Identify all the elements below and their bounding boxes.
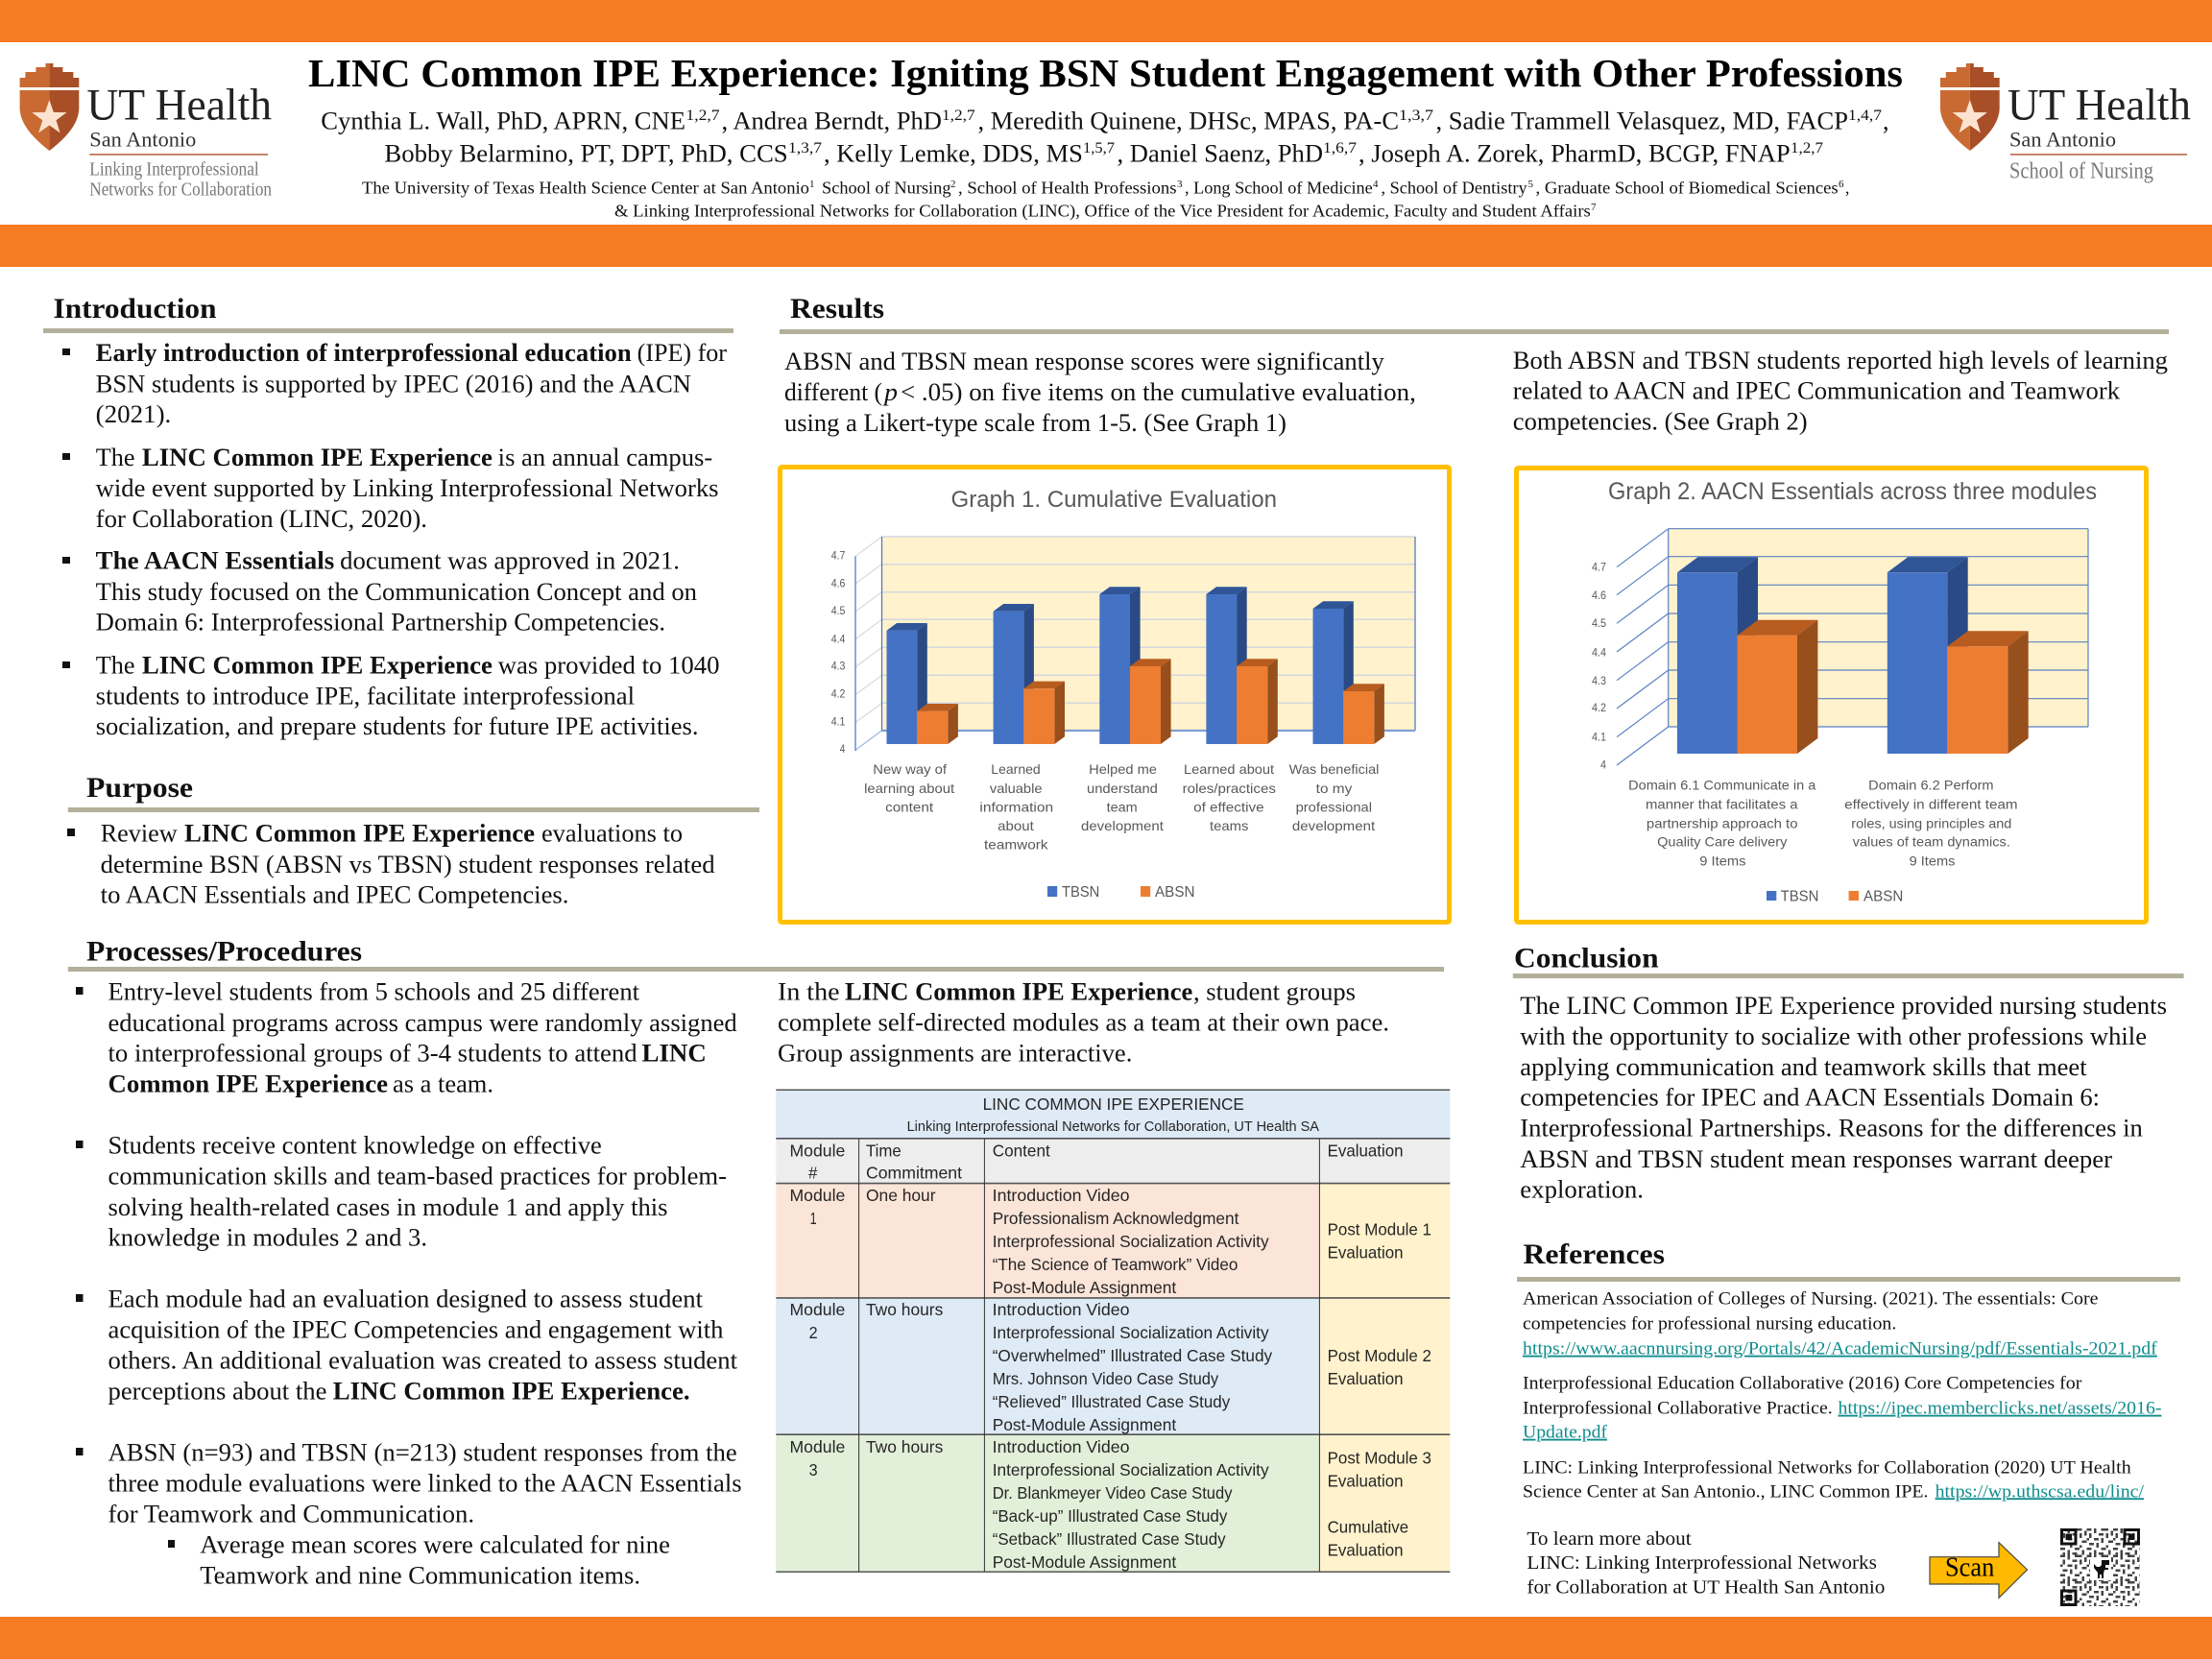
y axis labels: 4.6 (1592, 589, 1606, 602)
y axis labels: 4 (840, 744, 846, 756)
panel: processes and procedures (68, 936, 1444, 1589)
bars: ABSN (1738, 620, 2029, 754)
authors: 1,3,7 (1399, 108, 1433, 124)
authors: Cynthia L. Wall, PhD, APRN, CNE (321, 107, 685, 134)
reference: LINC: LINC: Linking Interprofessional Networks for Collaboration (2020) UT Health (1523, 1458, 2131, 1478)
column headers: Time (866, 1141, 902, 1160)
row: module 2 (789, 1300, 1431, 1434)
category labels: values of team dynamics. (1853, 833, 2010, 849)
bullet list: procedures: perceptions about the (108, 1377, 326, 1406)
column headers: Module (789, 1141, 845, 1160)
authors: , Kelly Lemke, DDS, MS (824, 139, 1083, 167)
plot back wall (1617, 529, 2088, 765)
panel: references (1517, 1238, 2180, 1606)
text: learn more: for Collaboration at UT Health San Antonio (1527, 1577, 1885, 1598)
text: graph 1 summary: using a Likert-type scale from 1-5. (See Graph 1) (784, 408, 1286, 437)
column headers (789, 1141, 1404, 1183)
row: module 1: Post-Module Assignment (993, 1278, 1176, 1297)
reference: IPEC: https://ipec.memberclicks.net/assets/2016- (1838, 1400, 2162, 1419)
chart title: Graph 1. Cumulative Evaluation (950, 487, 1277, 513)
bullet: purpose statement (67, 819, 715, 909)
bullet list: procedures: educational programs across campus were randomly assigned (108, 1008, 737, 1037)
bullet list: introduction: Domain 6: Interprofessional Partnership Competencies. (96, 607, 665, 636)
category labels: understand (1087, 781, 1158, 796)
text: graph 2 summary: related to AACN and IPEC Communication and Teamwork (1513, 376, 2121, 405)
affiliations: , (1845, 179, 1849, 198)
bullet list: introduction: (IPE) for (637, 338, 727, 367)
panel: introduction (43, 293, 733, 740)
bullet list: procedures: others. An additional evaluation was created to assess student (108, 1346, 738, 1375)
bullet: purpose statement: to AACN Essentials and IPEC Competencies. (101, 880, 568, 909)
bullet list: procedures: LINC Common IPE Experience. (333, 1377, 690, 1406)
y axis labels: 4.3 (1592, 674, 1606, 687)
row: module 2: Post Module 2 (1328, 1346, 1431, 1365)
row: module 2: Mrs. Johnson Video Case Study (993, 1369, 1218, 1388)
authors: 1,5,7 (1083, 140, 1115, 156)
authors: , Daniel Saenz, PhD (1118, 139, 1323, 167)
bullet list: procedures: Each module had an evaluation designed to assess student (108, 1285, 704, 1313)
category labels: professional (1296, 799, 1372, 814)
logo: UT Health San Antonio School of Nursing: School of Nursing (2009, 159, 2153, 184)
row: module 3: Post-Module Assignment (993, 1552, 1176, 1572)
bullet list: procedures (76, 977, 742, 1589)
arrow: scan (1930, 1543, 2028, 1598)
row: module 3: Introduction Video (993, 1437, 1129, 1456)
legend: ABSN (1863, 888, 1903, 904)
row: module 1: Interprofessional Socialization Activity (993, 1232, 1269, 1251)
text: graph 2 summary: Both ABSN and TBSN students reported high levels of learning (1513, 346, 2168, 374)
lower header orange band (0, 225, 2212, 267)
row: module 3: Evaluation (1328, 1541, 1404, 1560)
bullet: purpose statement: Review (101, 819, 179, 848)
bullet list: procedures: Entry-level students from 5 schools and 25 different (108, 977, 640, 1006)
row: module 3: Module (789, 1437, 845, 1456)
row: module 3: Two hours (866, 1437, 944, 1456)
text: module description: In the (778, 977, 839, 1006)
arrow: scan: Scan (1945, 1553, 1994, 1583)
panel: results (780, 293, 2169, 437)
text: graph 1 summary (784, 347, 1416, 437)
text: learn more (1527, 1529, 1885, 1598)
y axis labels: 4.4 (831, 634, 846, 645)
legend: TBSN (1781, 888, 1818, 904)
authors: 1,3,7 (788, 140, 822, 156)
bullet list: introduction: LINC Common IPE Experience (142, 443, 493, 471)
bullet list: procedures: LINC (641, 1039, 707, 1068)
reference: AACN: competencies for professional nursing education. (1523, 1314, 1896, 1334)
y axis labels (831, 551, 846, 756)
panel: purpose (67, 772, 759, 909)
y axis labels: 4.4 (1592, 645, 1606, 659)
authors: 1,6,7 (1323, 140, 1357, 156)
category labels: Quality Care delivery (1657, 833, 1787, 849)
authors: 1,2,7 (1791, 140, 1823, 156)
category labels (864, 761, 1379, 852)
plot back wall (855, 537, 1415, 751)
affiliations: & Linking Interprofessional Networks for Collaboration (LINC), Office of the Vice President for Academic, Faculty and Student Affairs (614, 202, 1591, 221)
row: module 2: Evaluation (1328, 1369, 1404, 1388)
reference: AACN: American Association of Colleges of Nursing. (2021). The essentials: Core (1523, 1289, 2099, 1309)
logo: UT Health San Antonio LINC: Linking Interprofessional (89, 159, 259, 180)
logo: UT Health San Antonio School of Nursing (1940, 63, 2191, 184)
affiliations: 7 (1591, 202, 1597, 213)
category labels: about (998, 818, 1034, 833)
row: module 2: “Overwhelmed” Illustrated Case Study (993, 1346, 1272, 1365)
row: module 3: “Setback” Illustrated Case Study (993, 1529, 1226, 1549)
text: graph 2 summary: competencies. (See Graph 2) (1513, 407, 1808, 436)
affiliations: 6 (1839, 179, 1844, 190)
column headers: Content (993, 1141, 1050, 1160)
affiliations: 4 (1373, 179, 1379, 190)
category labels: learning about (864, 781, 954, 796)
logo: UT Health San Antonio LINC: UT Health (86, 80, 272, 130)
legend (1767, 888, 1903, 904)
bullet list: procedures: to interprofessional groups of 3-4 students to attend (108, 1039, 637, 1068)
bullet list: procedures: communication skills and team-based practices for problem- (108, 1162, 727, 1190)
icon: shield (20, 63, 79, 151)
category labels: information (979, 799, 1053, 814)
category labels: 9 Items (1699, 853, 1745, 868)
bullet list: introduction: is an annual campus- (498, 443, 712, 471)
text: learn more: To learn more about (1527, 1529, 1692, 1550)
text: graph 2 summary (1513, 346, 2168, 436)
bullet list: introduction: (2021). (96, 399, 171, 428)
row: module 3: Interprofessional Socialization Activity (993, 1460, 1269, 1479)
table title (907, 1094, 1319, 1135)
category labels: New way of (873, 761, 947, 777)
row: module 3: “Back-up” Illustrated Case Study (993, 1506, 1228, 1526)
bullet list: introduction: was provided to 1040 (498, 651, 720, 680)
text: learn more: LINC: Linking Interprofessional Networks (1527, 1553, 1877, 1574)
authors: Bobby Belarmino, PT, DPT, PhD, CCS (384, 139, 788, 167)
bullet list: introduction (62, 338, 727, 740)
bullet list: procedures: for Teamwork and Communication. (108, 1500, 474, 1528)
authors: 1,4,7 (1848, 108, 1882, 124)
category labels: development (1081, 818, 1164, 833)
icon: QR code (2060, 1528, 2140, 1606)
heading: references: References (1523, 1238, 1665, 1270)
bullet list: introduction: The (96, 651, 134, 680)
legend: TBSN (1062, 884, 1099, 901)
affiliations: 3 (1177, 179, 1183, 190)
icon: shield (1940, 63, 2000, 151)
table: LINC common IPE experience modules (776, 1090, 1450, 1572)
chart: graph 2 AACN essentials (1517, 469, 2147, 922)
affiliations: School of Nursing (822, 179, 951, 198)
text: module description (778, 977, 1389, 1068)
affiliations: 5 (1528, 179, 1534, 190)
legend: ABSN (1155, 884, 1194, 901)
bullet list: introduction: BSN students is supported by IPEC (2016) and the AACN (96, 369, 691, 397)
row: module 1: “The Science of Teamwork” Video (993, 1255, 1238, 1274)
bullet: purpose statement: LINC Common IPE Experience (184, 819, 535, 848)
table title: LINC COMMON IPE EXPERIENCE (983, 1094, 1244, 1114)
bullet list: procedures: solving health-related cases in module 1 and apply this (108, 1192, 668, 1221)
affiliations: , School of Health Professions (958, 179, 1177, 198)
text: conclusion body (1520, 991, 2167, 1204)
row: module 1: Post Module 1 (1328, 1220, 1431, 1239)
bullet list: procedures: as a team. (393, 1070, 493, 1098)
category labels: Domain 6.1 Communicate in a (1628, 777, 1816, 792)
category labels: roles, using principles and (1851, 815, 2011, 830)
logo: UT Health San Antonio LINC: San Antonio (89, 127, 196, 151)
category labels: Learned (991, 761, 1041, 777)
logo: UT Health San Antonio School of Nursing: San Antonio (2009, 127, 2116, 151)
category labels: valuable (990, 781, 1043, 796)
text: conclusion body: competencies for IPEC and AACN Essentials Domain 6: (1520, 1083, 2100, 1112)
bullet list: procedures: three module evaluations were linked to the AACN Essentials (108, 1468, 742, 1497)
row: module 1: Module (789, 1186, 845, 1205)
row: module 1: Introduction Video (993, 1186, 1129, 1205)
bullet list: introduction: The (96, 443, 134, 471)
authors: , Joseph A. Zorek, PharmD, BCGP, FNAP (1358, 139, 1791, 167)
category labels: to my (1316, 781, 1352, 796)
text: graph 1 summary: p (882, 377, 898, 406)
category labels (1628, 777, 2018, 868)
row: module 2: Interprofessional Socialization Activity (993, 1323, 1269, 1342)
bullet list: procedures: knowledge in modules 2 and 3. (108, 1223, 427, 1252)
heading: results: Results (790, 293, 884, 325)
y axis labels: 4.5 (831, 606, 845, 617)
logo: UT Health San Antonio LINC (20, 63, 272, 200)
category labels: partnership approach to (1647, 815, 1798, 830)
row: module 2: Two hours (866, 1300, 944, 1319)
category labels: of effective (1193, 799, 1264, 814)
row: module 1: Professionalism Acknowledgment (993, 1209, 1239, 1228)
bars: TBSN (1677, 557, 1968, 754)
bullet list: introduction: socialization, and prepare students for future IPE activities. (96, 711, 698, 740)
row: module 1 (789, 1186, 1431, 1297)
row: module 2: 2 (809, 1323, 818, 1342)
authors: , Sadie Trammell Velasquez, MD, FACP (1436, 107, 1848, 134)
text: module description: LINC Common IPE Experience (845, 977, 1193, 1006)
y axis labels: 4.5 (1592, 616, 1606, 630)
bullet list: procedures: Students receive content knowledge on effective (108, 1131, 602, 1160)
reference: IPEC: Update.pdf (1523, 1424, 1608, 1443)
row: module 2: “Relieved” Illustrated Case Study (993, 1392, 1230, 1411)
row: module 1: 1 (810, 1209, 817, 1228)
bullet list: introduction: This study focused on the Communication Concept and on (96, 577, 697, 606)
legend (1047, 884, 1194, 901)
chart title: Graph 2. AACN Essentials across three modules (1608, 478, 2097, 505)
bullet list: procedures: acquisition of the IPEC Competencies and engagement with (108, 1315, 724, 1344)
row: module 2: Module (789, 1300, 845, 1319)
affiliations (362, 179, 1849, 221)
bullet list: introduction: Early introduction of interprofessional education (96, 338, 632, 367)
row: module 1: One hour (866, 1186, 936, 1205)
y axis labels: 4.7 (831, 551, 845, 563)
bullet list: procedures: Common IPE Experience (108, 1070, 388, 1098)
category labels: Domain 6.2 Perform (1868, 777, 1994, 792)
reference: IPEC (1523, 1375, 2162, 1443)
reference: LINC: Science Center at San Antonio., LINC Common IPE. (1523, 1482, 1928, 1502)
bullet list: introduction: wide event supported by Linking Interprofessional Networks (96, 473, 718, 502)
category labels: 9 Items (1910, 853, 1955, 868)
authors: 1,2,7 (685, 108, 720, 124)
reference: IPEC: Interprofessional Education Collaborative (2016) Core Competencies for (1523, 1375, 2081, 1394)
row: module 3: Dr. Blankmeyer Video Case Study (993, 1483, 1233, 1503)
row: module 3: Post Module 3 (1328, 1449, 1431, 1468)
row: module 3: 3 (809, 1460, 818, 1479)
category labels: Was beneficial (1289, 761, 1379, 777)
text: module description: , student groups (1193, 977, 1356, 1006)
column headers: Commitment (866, 1164, 962, 1183)
authors: , Andrea Berndt, PhD (722, 107, 942, 134)
authors (321, 107, 1888, 167)
heading: introduction: Introduction (54, 293, 217, 325)
category labels: Learned about (1184, 761, 1274, 777)
category labels: effectively in different team (1844, 796, 2018, 811)
row: module 2: Post-Module Assignment (993, 1415, 1176, 1434)
row: module 3: Evaluation (1328, 1472, 1404, 1491)
affiliations: , Long School of Medicine (1185, 179, 1373, 198)
text: conclusion body: ABSN and TBSN student mean responses warrant deeper (1520, 1144, 2112, 1173)
affiliations: 2 (950, 179, 956, 190)
y axis labels: 4 (1600, 758, 1606, 772)
bullet list: procedures: Average mean scores were calculated for nine (200, 1530, 670, 1559)
category labels: team (1107, 799, 1138, 814)
affiliations: , School of Dentistry (1381, 179, 1527, 198)
text: graph 1 summary: < .05) on five items on the cumulative evaluation, (901, 377, 1416, 406)
category labels: manner that facilitates a (1646, 796, 1798, 811)
logo: UT Health San Antonio LINC: Networks for Collaboration (89, 179, 272, 200)
text: module description: complete self-directed modules as a team at their own pace. (778, 1007, 1389, 1036)
column headers: # (808, 1164, 818, 1183)
text: module description: Group assignments are interactive. (778, 1039, 1132, 1068)
top orange band (0, 0, 2212, 42)
bars: TBSN (887, 587, 1354, 744)
panel: conclusion (1513, 943, 2184, 1204)
reference: AACN: https://www.aacnnursing.org/Portals/42/AcademicNursing/pdf/Essentials-2021.pdf (1523, 1340, 2158, 1359)
y axis labels: 4.1 (831, 716, 845, 728)
authors: , Meredith Quinene, DHSc, MPAS, PA-C (977, 107, 1399, 134)
row: module 3 (789, 1437, 1431, 1572)
column headers: Evaluation (1328, 1141, 1404, 1160)
y axis labels: 4.1 (1592, 730, 1606, 743)
row: module 2: Introduction Video (993, 1300, 1129, 1319)
bullet list: procedures: Teamwork and nine Communication items. (200, 1560, 640, 1589)
text: graph 1 summary: ABSN and TBSN mean response scores were significantly (784, 347, 1385, 375)
y axis labels (1592, 561, 1606, 772)
title: LINC Common IPE Experience: Igniting BSN Student Engagement with Other Professions (308, 51, 1903, 95)
y axis labels: 4.2 (1592, 701, 1606, 714)
heading: conclusion: Conclusion (1514, 943, 1659, 974)
affiliations: , Graduate School of Biomedical Sciences (1536, 179, 1839, 198)
table title: Linking Interprofessional Networks for Collaboration, UT Health SA (907, 1119, 1319, 1135)
y axis labels: 4.3 (831, 661, 845, 672)
text: conclusion body: Interprofessional Partnerships. Reasons for the differences in (1520, 1114, 2143, 1142)
bullet list: introduction: students to introduce IPE, facilitate interprofessional (96, 681, 635, 709)
text: conclusion body: The LINC Common IPE Experience provided nursing students (1520, 991, 2167, 1020)
text: conclusion body: applying communication and teamwork skills that meet (1520, 1052, 2087, 1081)
text: conclusion body: with the opportunity to socialize with other professions while (1520, 1022, 2147, 1050)
bullet list: introduction: for Collaboration (LINC, 2020). (96, 504, 427, 533)
reference: IPEC: Interprofessional Collaborative Practice. (1523, 1400, 1833, 1419)
bullet: purpose statement: evaluations to (541, 819, 683, 848)
bullet list: introduction: document was approved in 2021. (340, 546, 680, 575)
bottom orange band (0, 1617, 2212, 1659)
row: module 3: Cumulative (1328, 1518, 1408, 1537)
row: module 1: Evaluation (1328, 1243, 1404, 1262)
authors: , (1883, 107, 1889, 134)
category labels: roles/practices (1183, 781, 1276, 796)
bullet list: procedures: ABSN (n=93) and TBSN (n=213) student responses from the (108, 1438, 737, 1467)
category labels: teamwork (984, 836, 1049, 852)
y axis labels: 4.6 (831, 578, 845, 589)
text: graph 1 summary: different ( (784, 377, 882, 406)
bullet list: introduction: LINC Common IPE Experience (142, 651, 493, 680)
category labels: content (885, 799, 933, 814)
category labels: Helped me (1089, 761, 1157, 777)
bullet list: introduction: The AACN Essentials (96, 546, 334, 575)
heading: purpose: Purpose (86, 772, 193, 804)
bullet: purpose statement: determine BSN (ABSN vs TBSN) student responses related (101, 850, 715, 878)
y axis labels: 4.7 (1592, 561, 1606, 574)
category labels: teams (1210, 818, 1248, 833)
reference: AACN (1523, 1289, 2158, 1359)
heading: processes and procedures: Processes/Procedures (86, 936, 362, 968)
bars: ABSN (917, 659, 1384, 744)
reference: LINC: https://wp.uthscsa.edu/linc/ (1936, 1482, 2145, 1502)
reference: LINC (1523, 1458, 2145, 1502)
text: conclusion body: exploration. (1520, 1175, 1644, 1204)
logo: UT Health San Antonio School of Nursing: UT Health (2008, 80, 2191, 130)
category labels: development (1292, 818, 1375, 833)
chart: graph 1 cumulative evaluation (780, 467, 1450, 922)
y axis labels: 4.2 (831, 688, 845, 700)
affiliations: 1 (809, 179, 814, 190)
authors: 1,2,7 (942, 108, 975, 124)
affiliations: The University of Texas Health Science Center at San Antonio (362, 179, 809, 198)
